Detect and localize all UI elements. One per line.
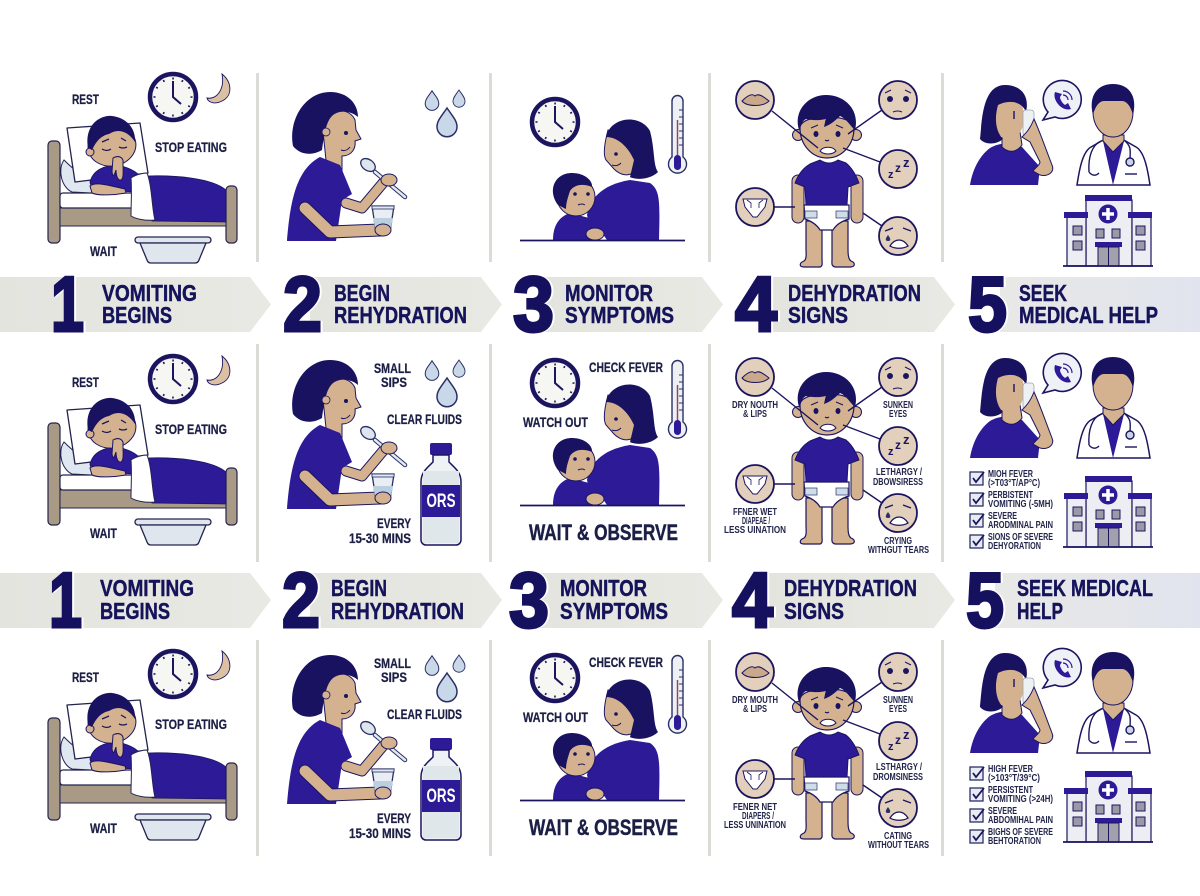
step 1 title: VOMITING <box>102 280 197 306</box>
step 3 title: MONITOR <box>565 280 653 306</box>
step 5 number: 5 <box>968 260 1007 348</box>
label: dry mouth: DRY MOUTH <box>732 695 778 706</box>
label: dry mouth: & LIPS <box>743 704 767 715</box>
step 5 title: MEDICAL HELP <box>1019 302 1158 328</box>
step 5 title: SEEK <box>1019 280 1067 306</box>
icon: clock <box>150 74 196 120</box>
label: fewer wet diapers: FFNER WET <box>733 507 777 518</box>
label: small sips: SMALL <box>374 656 411 671</box>
icon: clock <box>150 356 196 402</box>
checklist: PERSISTENT <box>988 785 1033 796</box>
icon: thermometer <box>668 656 686 733</box>
panel: row 2 step 2 rehydration <box>287 360 465 546</box>
step 4 title: DEHYDRATION <box>788 280 921 306</box>
label: crying without tears: WITHOUT TEARS <box>868 840 929 851</box>
checklist: HIGH FEVER <box>988 764 1033 775</box>
panel: row 1 step 3 monitor <box>520 96 686 240</box>
step 4 title: SIGNS <box>788 302 848 328</box>
caption: wait and observe: WAIT & OBSERVE <box>529 815 678 840</box>
checklist: (>103°T/39°C) <box>988 773 1040 784</box>
label: dry mouth: DRY NOUTH <box>732 400 778 411</box>
step 5 title: SEEK MEDICAL <box>1017 575 1153 601</box>
label: wait: WAIT <box>90 821 118 836</box>
label: dry mouth: & LIPS <box>743 409 767 420</box>
label: lethargy: DROMSINESS <box>873 772 923 783</box>
label: watch out: WATCH OUT <box>523 710 589 725</box>
label: crying without tears: CATING <box>884 831 912 842</box>
label: stop eating: STOP EATING <box>155 140 227 155</box>
step 4 number: 4 <box>732 556 773 644</box>
panel: row 3 step 2 rehydration <box>287 655 465 841</box>
label: clear fluids: CLEAR FLUIDS <box>387 412 462 427</box>
icon: clock <box>532 655 578 701</box>
label: fewer wet diapers: FENER NET <box>733 802 777 813</box>
illustration: sick child in bed <box>48 693 237 840</box>
label: rest: REST <box>72 375 100 390</box>
step 2 title: REHYDRATION <box>334 302 467 328</box>
icon: clock <box>532 360 578 406</box>
step 3 number: 3 <box>509 556 549 644</box>
illustration: child with sign icons <box>736 81 917 267</box>
label: sunken eyes: EYES <box>889 704 907 715</box>
icon: clock <box>150 651 196 697</box>
label: fewer wet diapers: LESS UINATION <box>724 525 786 536</box>
illustration: sick child in bed <box>48 116 237 263</box>
illustration: woman on phone <box>970 353 1081 458</box>
column dividers row 2 <box>256 344 944 562</box>
illustration: doctor <box>1077 652 1150 753</box>
illustration: woman on phone <box>970 648 1081 753</box>
illustration: child with sign icons <box>736 358 917 544</box>
illustration: mother with spoon and cup <box>287 360 405 509</box>
icon: water drops <box>425 655 465 702</box>
label: wait: WAIT <box>90 244 118 259</box>
step 1 number: 1 <box>51 260 84 348</box>
label: rest: REST <box>72 670 100 685</box>
icon: ORS bottle: ORS <box>426 786 456 807</box>
icon: moon <box>207 356 230 385</box>
icon: water drops <box>425 90 465 137</box>
checklist: ARODMINAL PAIN <box>988 520 1053 531</box>
step 1 number: 1 <box>49 556 82 644</box>
label: small sips: SIPS <box>381 375 407 390</box>
label: lethargy: LSTHARGY / <box>876 762 922 773</box>
icon: ORS bottle: ORS <box>426 491 456 512</box>
icon: thermometer <box>668 360 686 438</box>
step 4 title: DEHYDRATION <box>784 575 917 601</box>
illustration: sick child in bed <box>48 398 237 545</box>
label: small sips: SMALL <box>374 361 411 376</box>
caption: wait and observe: WAIT & OBSERVE <box>529 520 678 545</box>
checklist <box>970 469 1053 552</box>
illustration: mother with spoon and cup <box>287 655 405 804</box>
checklist: BEHTORATION <box>988 836 1041 847</box>
icon: water drops <box>425 360 465 407</box>
panel: row 3 step 4 dehydration signs <box>724 653 929 851</box>
panel: row 1 step 1 vomiting begins <box>48 74 237 263</box>
label: stop eating: STOP EATING <box>155 717 227 732</box>
column dividers row 3 <box>256 640 944 856</box>
panel: row 2 step 5 medical help <box>970 353 1153 552</box>
label: sunken eyes: SUNKEN <box>883 400 913 411</box>
label: stop eating: STOP EATING <box>155 422 227 437</box>
illustration: mother and child <box>520 385 685 506</box>
illustration: doctor <box>1077 357 1150 458</box>
panel: row 1 step 4 dehydration signs <box>736 81 917 267</box>
label: watch out: WATCH OUT <box>523 415 589 430</box>
label: clear fluids: CLEAR FLUIDS <box>387 707 462 722</box>
label: wait: WAIT <box>90 526 118 541</box>
label: lethargy: DBOWSIRESS <box>873 477 923 488</box>
illustration: mother and child <box>520 120 685 240</box>
checklist: SEVERE <box>988 806 1017 817</box>
step 1 title: VOMITING <box>100 575 194 601</box>
step 1 title: BEGINS <box>100 598 170 624</box>
icon: ORS bottle <box>421 443 461 545</box>
checklist: VOMITING (>24H) <box>988 794 1053 805</box>
panel: row 1 step 2 rehydration <box>287 90 465 241</box>
column dividers row 1 <box>256 73 944 262</box>
step 4 title: SIGNS <box>784 598 844 624</box>
label: every 15-30 mins: 15-30 MINS <box>349 826 411 841</box>
checklist: VOMITING (-5MH) <box>988 499 1053 510</box>
label: check fever: CHECK FEVER <box>589 360 663 375</box>
label: crying without tears: WITHGUT TEARS <box>868 545 929 556</box>
step banner row 1 <box>0 260 1200 348</box>
illustration: child with sign icons <box>736 653 917 839</box>
checklist: SIONS OF SEVERE <box>988 532 1053 543</box>
label: fewer wet diapers: DIAPERS / <box>742 811 774 822</box>
checklist: BIGHS OF SEVERE <box>988 827 1053 838</box>
panel: row 2 step 3 monitor <box>520 360 686 545</box>
step 4 number: 4 <box>735 260 777 348</box>
icon: moon <box>207 651 230 680</box>
label: every 15-30 mins: EVERY <box>377 516 411 531</box>
label: small sips: SIPS <box>381 670 407 685</box>
step 3 title: SYMPTOMS <box>565 302 674 328</box>
step 5 number: 5 <box>966 556 1004 644</box>
step 2 title: BEGIN <box>334 280 390 306</box>
step 2 title: BEGIN <box>331 575 387 601</box>
label: rest: REST <box>72 92 100 107</box>
banner arrows <box>0 277 1200 332</box>
illustration: mother with spoon and cup <box>287 92 405 241</box>
label: every 15-30 mins: 15-30 MINS <box>349 531 411 546</box>
checklist: PERBISTENT <box>988 490 1033 501</box>
step 5 title: HELP <box>1017 598 1063 624</box>
step 3 title: MONITOR <box>560 575 647 601</box>
label: every 15-30 mins: EVERY <box>377 811 411 826</box>
checklist: ABDOMIHAL PAIN <box>988 815 1053 826</box>
label: sunken eyes: SUNNEN <box>883 695 913 706</box>
label: fewer wet diapers: DIAPEAE / <box>742 516 770 527</box>
icon: hospital <box>1063 476 1153 547</box>
step 3 title: SYMPTOMS <box>560 598 668 624</box>
checklist: SEVERE <box>988 511 1017 522</box>
icon: hospital <box>1063 195 1153 266</box>
panel: row 3 step 3 monitor <box>520 655 686 840</box>
checklist: MIOH FEVER <box>988 469 1033 480</box>
label: lethargy: LETHARGY / <box>876 467 922 478</box>
step 2 number: 2 <box>283 260 322 348</box>
step 2 number: 2 <box>282 556 320 644</box>
icon: ORS bottle <box>421 738 461 840</box>
label: crying without tears: CRYING <box>884 536 912 547</box>
illustration: mother and child <box>520 680 685 800</box>
icon: moon <box>207 74 230 103</box>
label: check fever: CHECK FEVER <box>589 655 663 670</box>
illustration: doctor <box>1077 84 1150 185</box>
panel: row 2 step 1 vomiting begins <box>48 356 237 545</box>
label: sunken eyes: EYES <box>889 409 907 420</box>
panel: row 3 step 5 medical help <box>970 648 1153 847</box>
step banner row 2 <box>0 556 1200 644</box>
icon: clock <box>532 99 578 145</box>
icon: thermometer <box>668 96 686 173</box>
step 1 title: BEGINS <box>102 302 172 328</box>
step 2 title: REHYDRATION <box>331 598 464 624</box>
panel: row 1 step 5 medical help <box>970 80 1153 266</box>
banner arrows <box>0 573 1200 628</box>
checklist: DEHYORATION <box>988 541 1041 552</box>
icon: hospital <box>1063 771 1153 842</box>
checklist: (>T03°T/AP°C) <box>988 478 1040 489</box>
illustration: woman on phone <box>970 80 1081 185</box>
panel: row 2 step 4 dehydration signs <box>724 358 929 556</box>
panel: row 3 step 1 vomiting begins <box>48 651 237 840</box>
step 3 number: 3 <box>513 260 554 348</box>
label: fewer wet diapers: LESS UNINATION <box>724 820 786 831</box>
checklist <box>970 764 1053 847</box>
